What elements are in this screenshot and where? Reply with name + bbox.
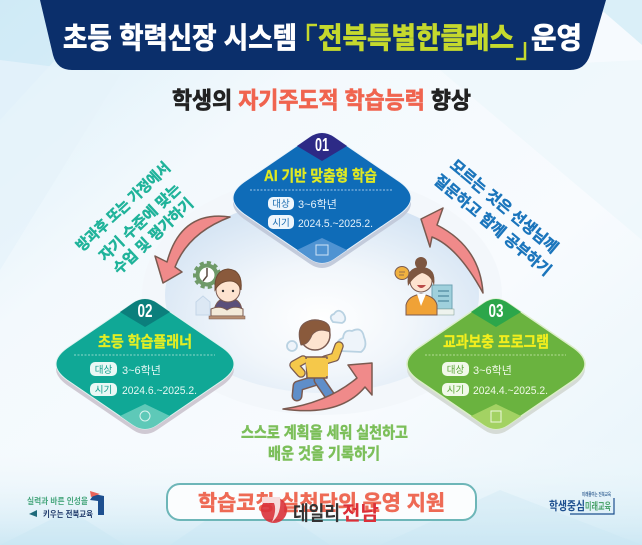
number tab <box>471 299 521 327</box>
target row <box>442 362 512 377</box>
subtitle: 학생의 자기주도적 학습능력 향상 <box>172 87 471 113</box>
title text: 초등 학력신장 시스템 <box>63 22 297 55</box>
target row <box>268 197 337 211</box>
number tab <box>120 299 170 327</box>
icon tab <box>120 404 170 429</box>
panel heading: 교과보충 프로그램 <box>443 333 549 351</box>
target row <box>90 362 161 377</box>
arrow: top to left <box>155 216 230 283</box>
target row: 대상 <box>447 365 464 376</box>
logo: student-centered education <box>549 491 614 514</box>
panel: 03 supplementary program <box>407 299 585 434</box>
target row: 3~6학년 <box>473 364 512 377</box>
period row: 시기 <box>447 385 464 396</box>
text: after-school note: 자기 수준에 맞는 <box>96 181 185 265</box>
title text: 운영 <box>531 22 582 55</box>
logo: jeonbuk education: 키우는 전북교육 <box>43 509 93 519</box>
logo: student-centered education: 학생중심 <box>549 498 585 513</box>
icon tab <box>297 238 347 263</box>
period row: 시기 <box>95 385 112 396</box>
period row: 시기 <box>272 218 290 229</box>
panel heading: 초등 학습플래너 <box>98 333 192 351</box>
text: ask the teacher note: 모르는 것은 선생님께 <box>446 156 561 257</box>
background ring <box>142 175 502 415</box>
period row <box>268 215 373 230</box>
logo: student-centered education: 미래교육 <box>585 500 611 513</box>
target row: 대상 <box>272 199 290 210</box>
text: after-school note: 수업 및 평가하기 <box>110 195 197 278</box>
text: self-study note: 스스로 계획을 세워 실천하고 <box>241 424 408 442</box>
target row: 3~6학년 <box>122 364 161 377</box>
watermark <box>261 497 379 525</box>
title text <box>63 22 582 59</box>
logo: jeonbuk education <box>27 491 104 519</box>
icon: clouds <box>287 311 365 352</box>
title text: 전북특별한클래스 <box>318 22 514 55</box>
text: after-school note: 방과후 또는 가정에서 <box>73 159 174 255</box>
logo: jeonbuk education: 실력과 바른 인성을 <box>27 496 88 506</box>
target row: 대상 <box>95 365 112 376</box>
callout: coaching support <box>167 484 476 520</box>
period row <box>442 383 548 397</box>
text: ask the teacher note: 질문하고 함께 공부하기 <box>430 171 555 280</box>
icon: teacher with board <box>395 257 454 315</box>
panel heading: AI 기반 맞춤형 학습 <box>264 167 377 185</box>
number tab: 02 <box>138 301 152 321</box>
watermark: 데일리 <box>293 502 340 525</box>
icon: running boy <box>294 320 339 396</box>
logo: student-centered education: 미래를여는 전북교육 <box>582 491 611 498</box>
title banner <box>40 0 606 70</box>
arrow: growth <box>283 363 372 411</box>
number tab: 03 <box>488 301 504 321</box>
number tab <box>297 133 347 161</box>
callout: coaching support: 학습코칭 실천단의 운영 지원 <box>198 492 445 515</box>
arrow: right to top <box>421 208 483 293</box>
period row: 2024.5.~2025.2. <box>298 218 373 230</box>
panel: 01 AI learning <box>233 133 411 268</box>
text: self-study note: 배운 것을 기록하기 <box>268 445 380 463</box>
period row: 2024.4.~2025.2. <box>473 385 548 397</box>
icon tab <box>471 404 521 429</box>
panel: 02 learning planner <box>56 299 234 434</box>
icon: student with gear <box>195 263 245 319</box>
period row: 2024.6.~2025.2. <box>122 385 197 397</box>
text: after-school note <box>73 159 197 278</box>
target row: 3~6학년 <box>298 198 337 211</box>
period row <box>90 383 197 397</box>
number tab: 01 <box>315 135 329 155</box>
watermark: 전남 <box>342 502 379 525</box>
text: self-study note <box>241 424 408 463</box>
